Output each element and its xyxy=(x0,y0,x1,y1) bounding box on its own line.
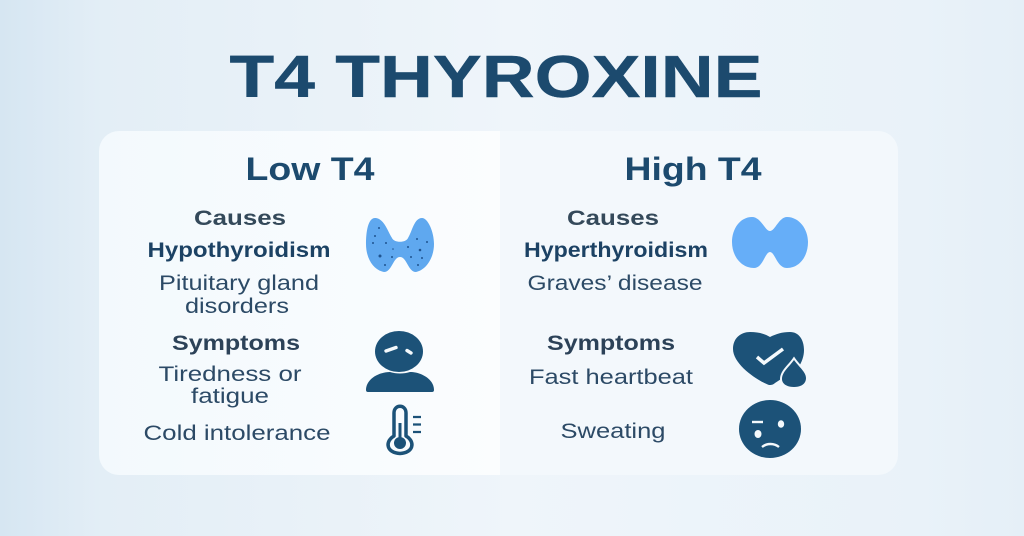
text: pituitary gland: Pituitary gland xyxy=(159,271,319,295)
text: graves' disease: Graves’ disease xyxy=(528,271,702,295)
text: symptoms heading: Symptoms xyxy=(172,331,300,355)
comparison panel xyxy=(99,131,898,475)
text: hypothyroidism: Hypothyroidism xyxy=(148,239,330,262)
text: fatigue: fatigue xyxy=(191,384,269,408)
text: causes heading: Causes xyxy=(567,206,659,230)
panel: low T4 column xyxy=(144,151,434,454)
text: cold intolerance: Cold intolerance xyxy=(144,421,330,445)
icon: thermometer xyxy=(388,406,421,454)
heading: high T4: High T4 xyxy=(624,151,762,187)
icon: thyroid xyxy=(732,217,808,268)
icon: thyroid with spots xyxy=(366,218,434,272)
text: hyperthyroidism: Hyperthyroidism xyxy=(524,239,708,262)
text: disorders: disorders xyxy=(185,294,289,318)
panel: low T4 background xyxy=(99,131,500,475)
panel: high T4 column xyxy=(524,151,808,458)
title: T4 THYROXINE xyxy=(230,44,762,110)
icon: tired person xyxy=(366,331,434,392)
icon: heart with check and drop xyxy=(733,332,806,387)
text: sweating: Sweating xyxy=(560,419,666,443)
text: causes heading: Causes xyxy=(194,206,286,230)
text: fast heartbeat: Fast heartbeat xyxy=(529,365,693,389)
heading: low T4: Low T4 xyxy=(246,151,375,187)
panel: high T4 background xyxy=(786,131,898,475)
icon: worried face xyxy=(739,400,801,458)
text: tiredness or: Tiredness or xyxy=(158,362,302,386)
text: symptoms heading: Symptoms xyxy=(547,331,675,355)
